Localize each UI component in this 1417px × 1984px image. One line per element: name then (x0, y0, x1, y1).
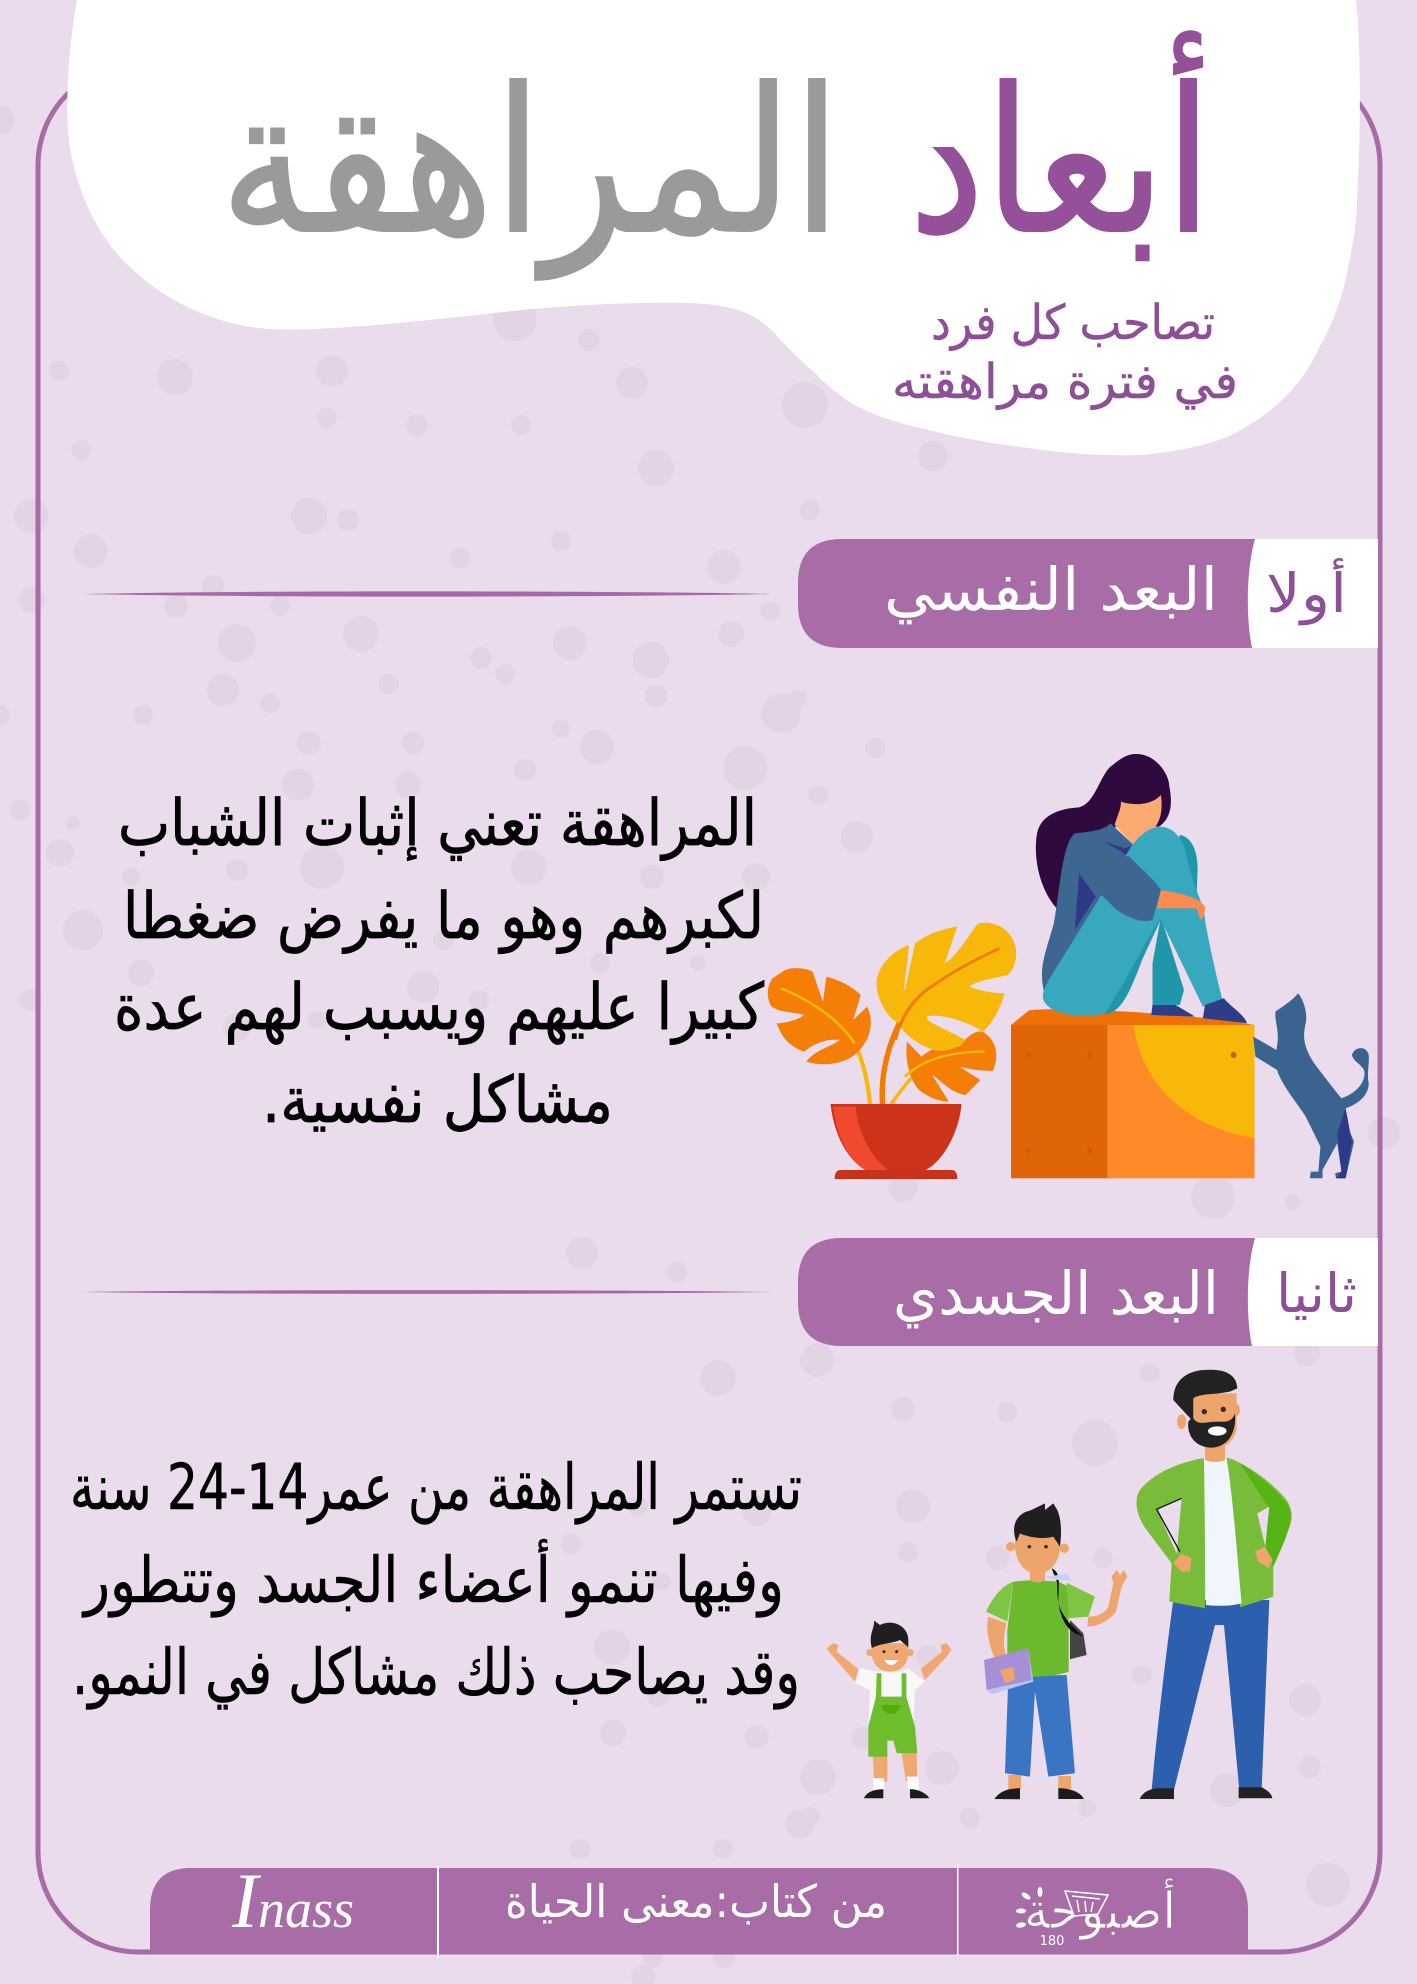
section 2 body text: تستمر المراهقة من عمر14‏-‏24 سنة (70, 1451, 802, 1525)
section 2 divider line (82, 1290, 772, 1294)
man (1136, 1370, 1292, 1799)
section 1 heading pill: أولا (1266, 558, 1347, 625)
boy (984, 1503, 1127, 1799)
section 2 body text: وقد يصاحب ذلك مشاكل في النمو. (72, 1636, 800, 1710)
box seat (1011, 1009, 1255, 1178)
child (827, 1621, 952, 1798)
footer source: من كتاب:معنى الحياة (505, 1875, 887, 1928)
flower pot (831, 1104, 962, 1179)
section 1 body text: مشاكل نفسية. (262, 1064, 613, 1138)
section 1 body text: كبيرا عليهم ويسبب لهم عدة (114, 971, 764, 1045)
subtitle (892, 295, 1238, 410)
section 2 heading pill: ثانيا (1276, 1262, 1357, 1325)
section 2 body text: وفيها تنمو أعضاء الجسد وتتطور (81, 1539, 784, 1618)
subtitle: تصاحب كل فرد (931, 295, 1215, 351)
section 1 body text (114, 787, 764, 1138)
plant stems (854, 1000, 928, 1104)
illustration: sad woman, plant, box and cat (768, 754, 1369, 1179)
title: أبعاد المراهقة (220, 31, 1212, 280)
illustration: child, boy and man growing (827, 1370, 1292, 1799)
section 2 heading pill (798, 1238, 1378, 1346)
section 1 heading pill (798, 539, 1378, 648)
title: أبعاد المراهقة: المراهقة (220, 46, 841, 280)
section 2 heading pill: البعد الجسدي (893, 1259, 1219, 1328)
left orange leaf (768, 968, 871, 1064)
subtitle: في فترة مراهقته (892, 354, 1238, 410)
footer logo: 180 (1040, 1934, 1064, 1949)
title blob (67, 0, 1360, 455)
footer logo: أصبوحة (1024, 1878, 1176, 1940)
cat (1253, 993, 1369, 1178)
sad woman (1036, 754, 1247, 1023)
footer bar (150, 1857, 1248, 1958)
yellow leaf (877, 923, 1016, 1051)
section 1 body text: لكبرهم وهو ما يفرض ضغطا (123, 880, 764, 954)
footer signature: Inass (231, 1857, 354, 1944)
section 2 body text (70, 1451, 802, 1710)
section 1 heading pill: البعد النفسي (884, 555, 1218, 625)
section 1 divider line (82, 591, 772, 597)
title: أبعاد المراهقة: أبعاد (909, 31, 1212, 279)
section 1 body text: المراهقة تعني إثبات الشباب (118, 787, 757, 861)
right orange leaf (906, 1031, 996, 1102)
